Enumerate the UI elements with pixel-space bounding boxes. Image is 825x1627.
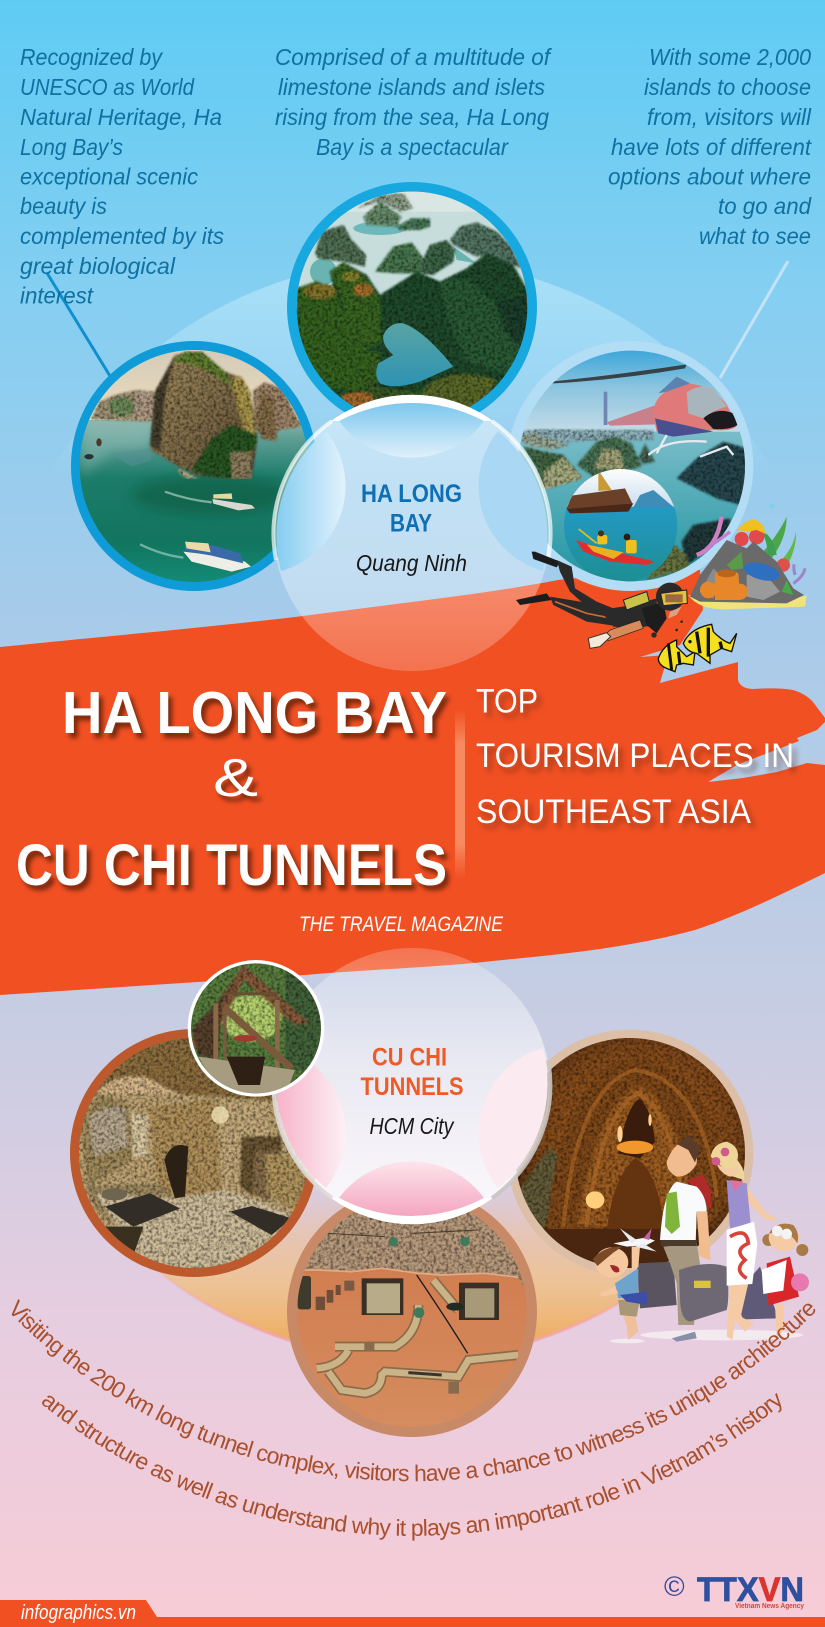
lens: right <box>479 1048 548 1188</box>
text block: left note: complemented by its <box>20 223 224 249</box>
photo: tunnel diorama <box>287 1206 537 1437</box>
hub circle: Cu Chi Tunnels <box>274 948 550 1224</box>
text block: centre note: limestone islands and islets <box>278 74 545 100</box>
curved text: Cu Chi description: and structure as well as understand why it plays an important role in Vietnam’s history <box>42 1392 782 1541</box>
title: main heading: CU CHI TUNNELS <box>16 833 447 898</box>
text block: right note: options about where <box>608 164 811 190</box>
source credit: THE TRAVEL MAGAZINE <box>299 913 504 936</box>
illustration: coral reef <box>688 503 807 609</box>
subtitle: TOP <box>476 682 538 720</box>
lens: right <box>479 431 548 571</box>
illustration: yellow fish <box>658 624 737 672</box>
logo: TTXVN: TTXVN <box>697 1571 804 1609</box>
subtitle: TOURISM PLACES IN <box>476 737 794 775</box>
logo: TTXVN: © <box>664 1571 685 1602</box>
curved text: Cu Chi description: Visiting the 200 km long tunnel complex, visitors have a chance to witness its unique architecture <box>12 1299 816 1482</box>
photo: glowing tunnel <box>510 1030 754 1276</box>
grey crescent: right edge <box>492 1060 550 1198</box>
left suitcase <box>637 1262 677 1308</box>
subtitle: SOUTHEAST ASIA <box>476 793 751 831</box>
text block: left note: exceptional scenic <box>20 164 198 190</box>
grey crescent: left edge <box>274 1060 332 1198</box>
hub label: Quang Ninh <box>356 550 467 576</box>
hub label: TUNNELS <box>360 1073 464 1101</box>
inset photo: tunnel entrance hut <box>185 960 328 1100</box>
back suitcase <box>733 1267 778 1319</box>
hub label: HA LONG <box>361 480 462 508</box>
man <box>660 1135 711 1342</box>
title: main heading: & <box>213 748 258 808</box>
text block: left note: Natural Heritage, Ha <box>20 104 222 130</box>
hub circle: Ha Long Bay <box>273 395 551 671</box>
logo: TTXVN: Vietnam News Agency <box>735 1601 805 1610</box>
text block: left note: beauty is <box>20 193 107 219</box>
text block: right note: to go and <box>718 193 812 219</box>
hub label <box>360 1044 464 1139</box>
text block: left note: Recognized by <box>20 44 163 70</box>
hub label <box>356 480 467 576</box>
text block: left note: Long Bay’s <box>20 134 123 160</box>
text block: right note: With some 2,000 <box>649 44 811 70</box>
footer: website: infographics.vn <box>21 1602 136 1624</box>
title: main heading <box>16 680 447 898</box>
white crescent: right edge <box>492 421 551 560</box>
pointer line: left note <box>47 273 110 376</box>
text block: right note: from, visitors will <box>647 104 812 130</box>
photo: helicopter, islands and kayak collage <box>500 341 760 591</box>
text block: left note <box>20 44 224 309</box>
halo arc behind Ha Long photos <box>0 260 824 1084</box>
illustration: travelling family <box>593 1135 809 1343</box>
hub label: CU CHI <box>372 1044 447 1072</box>
text block: left note: great biological <box>20 253 176 279</box>
lens: top <box>339 403 484 458</box>
photo: Cu Chi carved cave <box>65 1027 332 1277</box>
illustration: scuba diver <box>516 552 687 648</box>
text block: right note: islands to choose <box>644 74 811 100</box>
girl <box>762 1223 809 1337</box>
boy <box>593 1228 657 1340</box>
right suitcase <box>679 1264 728 1322</box>
text block: centre note: rising from the sea, Ha Long <box>275 104 549 130</box>
halo arc behind Cu Chi photos <box>0 535 824 1359</box>
lens: bottom <box>339 1161 484 1216</box>
text block: centre note: Bay is a spectacular <box>316 134 509 160</box>
hub label: BAY <box>390 510 432 538</box>
text block: right note: what to see <box>699 223 811 249</box>
footer: bar and tab <box>0 1600 825 1627</box>
hub label: HCM City <box>370 1113 455 1139</box>
orange title band <box>0 570 825 995</box>
divider between title and subtitle <box>455 710 465 878</box>
text block: left note: UNESCO as World <box>20 74 195 100</box>
text block: right note <box>608 44 813 249</box>
woman <box>711 1142 780 1340</box>
lens: left <box>276 1048 345 1188</box>
lens: left <box>276 431 345 571</box>
pointer line: right note <box>720 261 788 378</box>
title: main heading: HA LONG BAY <box>62 680 447 746</box>
white crescent: left edge <box>273 421 332 560</box>
text block: centre note: Comprised of a multitude of <box>275 44 553 70</box>
white crescent: bottom <box>331 1198 493 1224</box>
subtitle <box>476 682 794 831</box>
white crescent: top <box>331 395 493 421</box>
text block: centre note <box>275 44 553 160</box>
text block: left note: interest <box>20 283 95 309</box>
photo: aerial karst with heart lake <box>287 182 537 416</box>
text block: right note: have lots of different <box>611 134 813 160</box>
photo: Ha Long karst and boats <box>71 341 314 591</box>
